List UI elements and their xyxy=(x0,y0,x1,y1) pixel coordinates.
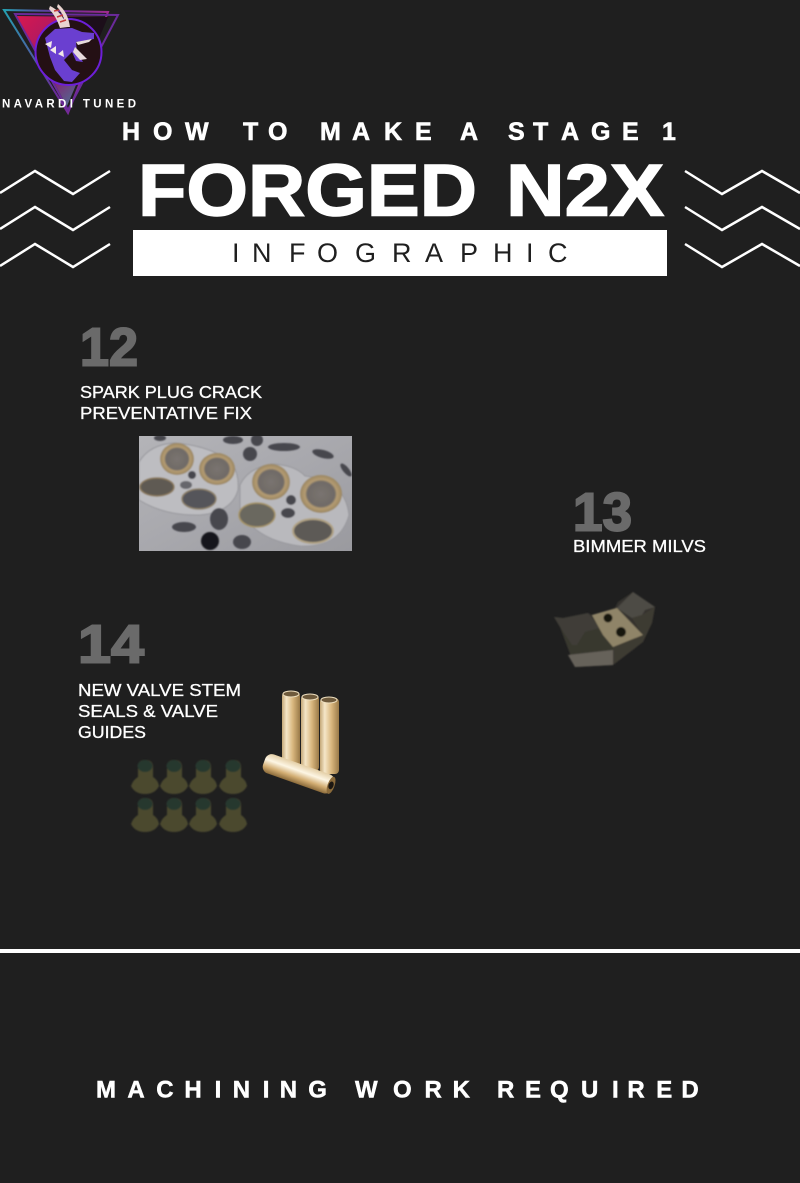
footer heading: machining work required: MACHINING WORK REQUIRED xyxy=(96,1076,699,1104)
step 12 label xyxy=(80,382,262,423)
zigzag decoration: left xyxy=(0,171,110,267)
photo: valve guides xyxy=(261,691,339,796)
step number 12: 12 xyxy=(80,318,138,378)
step 13 label: BIMMER MILVS xyxy=(573,536,706,556)
subtitle text: INFOGRAPHIC xyxy=(232,238,568,268)
photo: milled lifter block xyxy=(554,592,655,667)
title: forged n2x: FORGED xyxy=(138,150,477,232)
step 14 label: NEW VALVE STEM xyxy=(78,680,241,700)
step number 13: 13 xyxy=(573,482,632,542)
logo wordmark: NAVARDI TUNED xyxy=(2,98,136,110)
step 14 label xyxy=(78,680,241,742)
logo: Navardi Tuned dragon xyxy=(2,4,136,113)
step 12 xyxy=(80,318,353,551)
photo: valve stem seals xyxy=(131,760,247,832)
step 13 xyxy=(554,482,706,667)
subtitle banner xyxy=(133,230,667,276)
zigzag decoration: right xyxy=(685,171,800,267)
heading: how to make a stage 1: HOW TO MAKE A STAGE 1 xyxy=(122,118,676,146)
step 12 label: PREVENTATIVE FIX xyxy=(80,403,252,423)
photo: cylinder head valves xyxy=(139,434,353,551)
title: forged n2x xyxy=(138,150,664,232)
step 14 label: GUIDES xyxy=(78,722,146,742)
step 14 label: SEALS & VALVE xyxy=(78,701,218,721)
step 14 xyxy=(78,614,339,832)
divider line xyxy=(0,949,800,953)
title: forged n2x: N2X xyxy=(506,150,664,232)
logo triangle frame xyxy=(4,10,118,113)
step number 14: 14 xyxy=(78,614,144,674)
step 12 label: SPARK PLUG CRACK xyxy=(80,382,262,402)
logo dragon badge xyxy=(36,4,102,85)
